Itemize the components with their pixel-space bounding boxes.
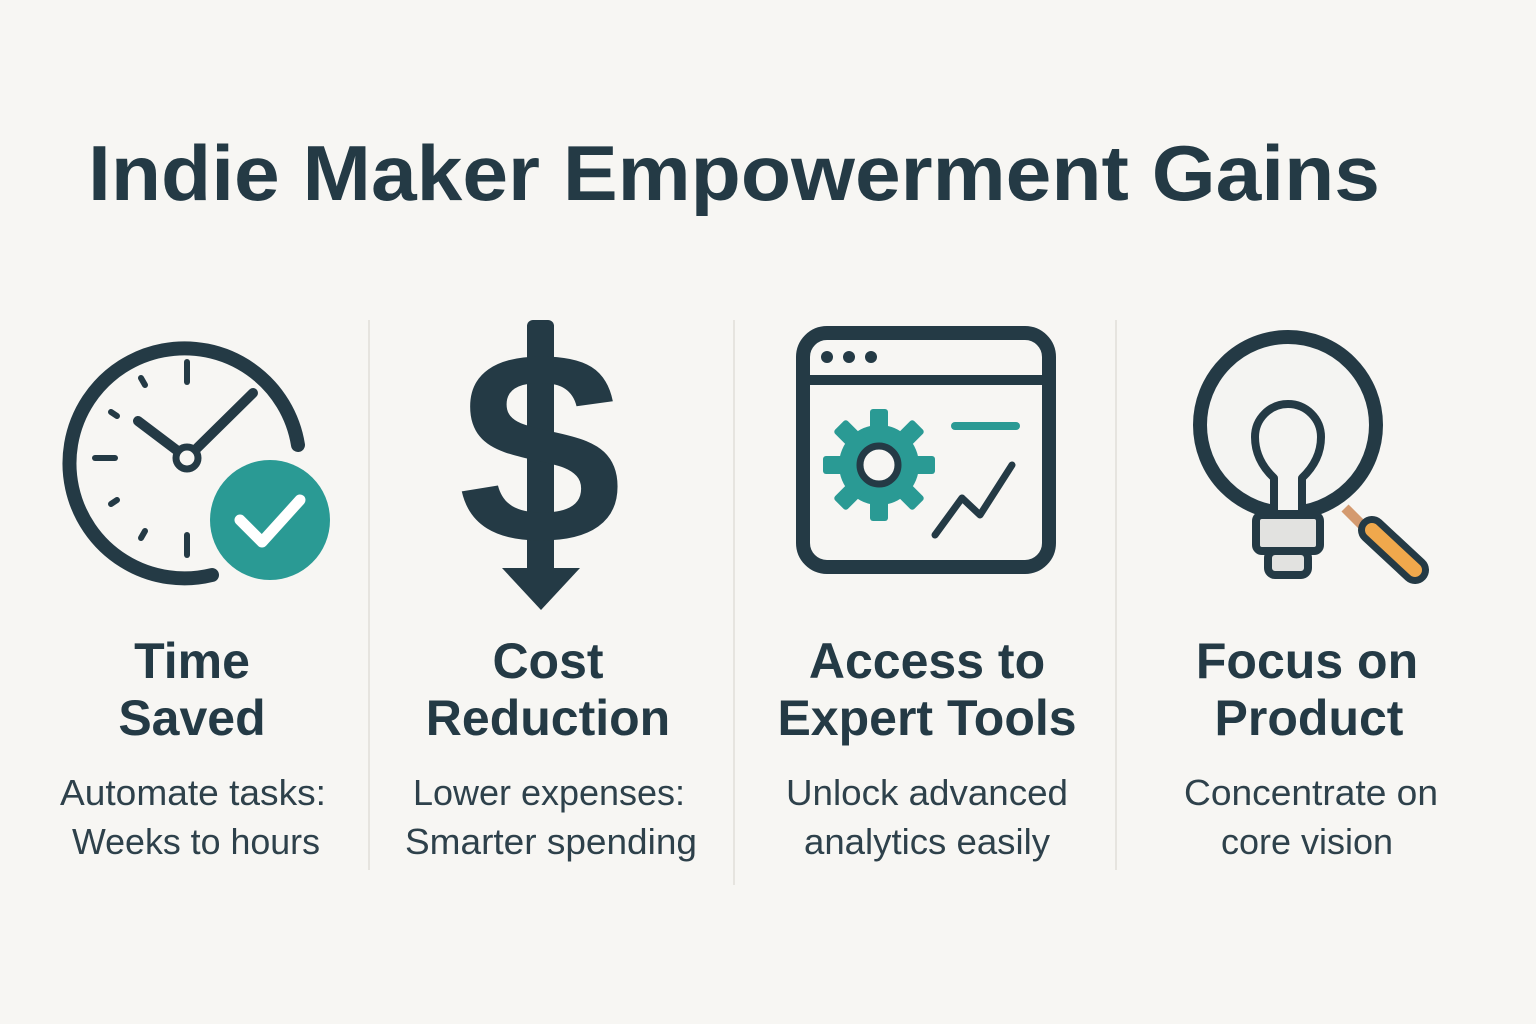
- panel: cost reduction: Reduction: [426, 690, 670, 746]
- text: cost reduction: Lower expenses:: [413, 772, 685, 813]
- panel: expert tools: Expert Tools: [777, 690, 1077, 746]
- title: Indie Maker Empowerment Gains: [88, 129, 1380, 217]
- heading: focus on product: Focus on: [1196, 633, 1418, 689]
- text: cost reduction: Smarter spending: [405, 821, 697, 862]
- panel: focus on product: [1184, 337, 1438, 862]
- icon: dollar with down arrow: S: [454, 304, 628, 594]
- panel: time saved: [60, 348, 330, 862]
- text: time saved: Weeks to hours: [72, 821, 320, 862]
- panel: expert tools: [777, 333, 1077, 862]
- icon: magnifier with bulb: [1200, 337, 1415, 575]
- icon: browser with gear and chart: [803, 333, 1049, 567]
- text: focus on product: core vision: [1221, 821, 1393, 862]
- heading: time saved: Time: [134, 633, 250, 689]
- text: time saved: Automate tasks:: [60, 772, 326, 813]
- panel: cost reduction: [405, 304, 697, 862]
- heading: cost reduction: Cost: [492, 633, 604, 689]
- panel: focus on product: Product: [1215, 690, 1404, 746]
- icon: clock with check: [69, 348, 330, 580]
- text: focus on product: Concentrate on: [1184, 772, 1438, 813]
- heading: expert tools: Access to: [809, 633, 1045, 689]
- panel: time saved: Saved: [118, 690, 266, 746]
- text: expert tools: Unlock advanced: [786, 772, 1068, 813]
- text: expert tools: analytics easily: [804, 821, 1050, 862]
